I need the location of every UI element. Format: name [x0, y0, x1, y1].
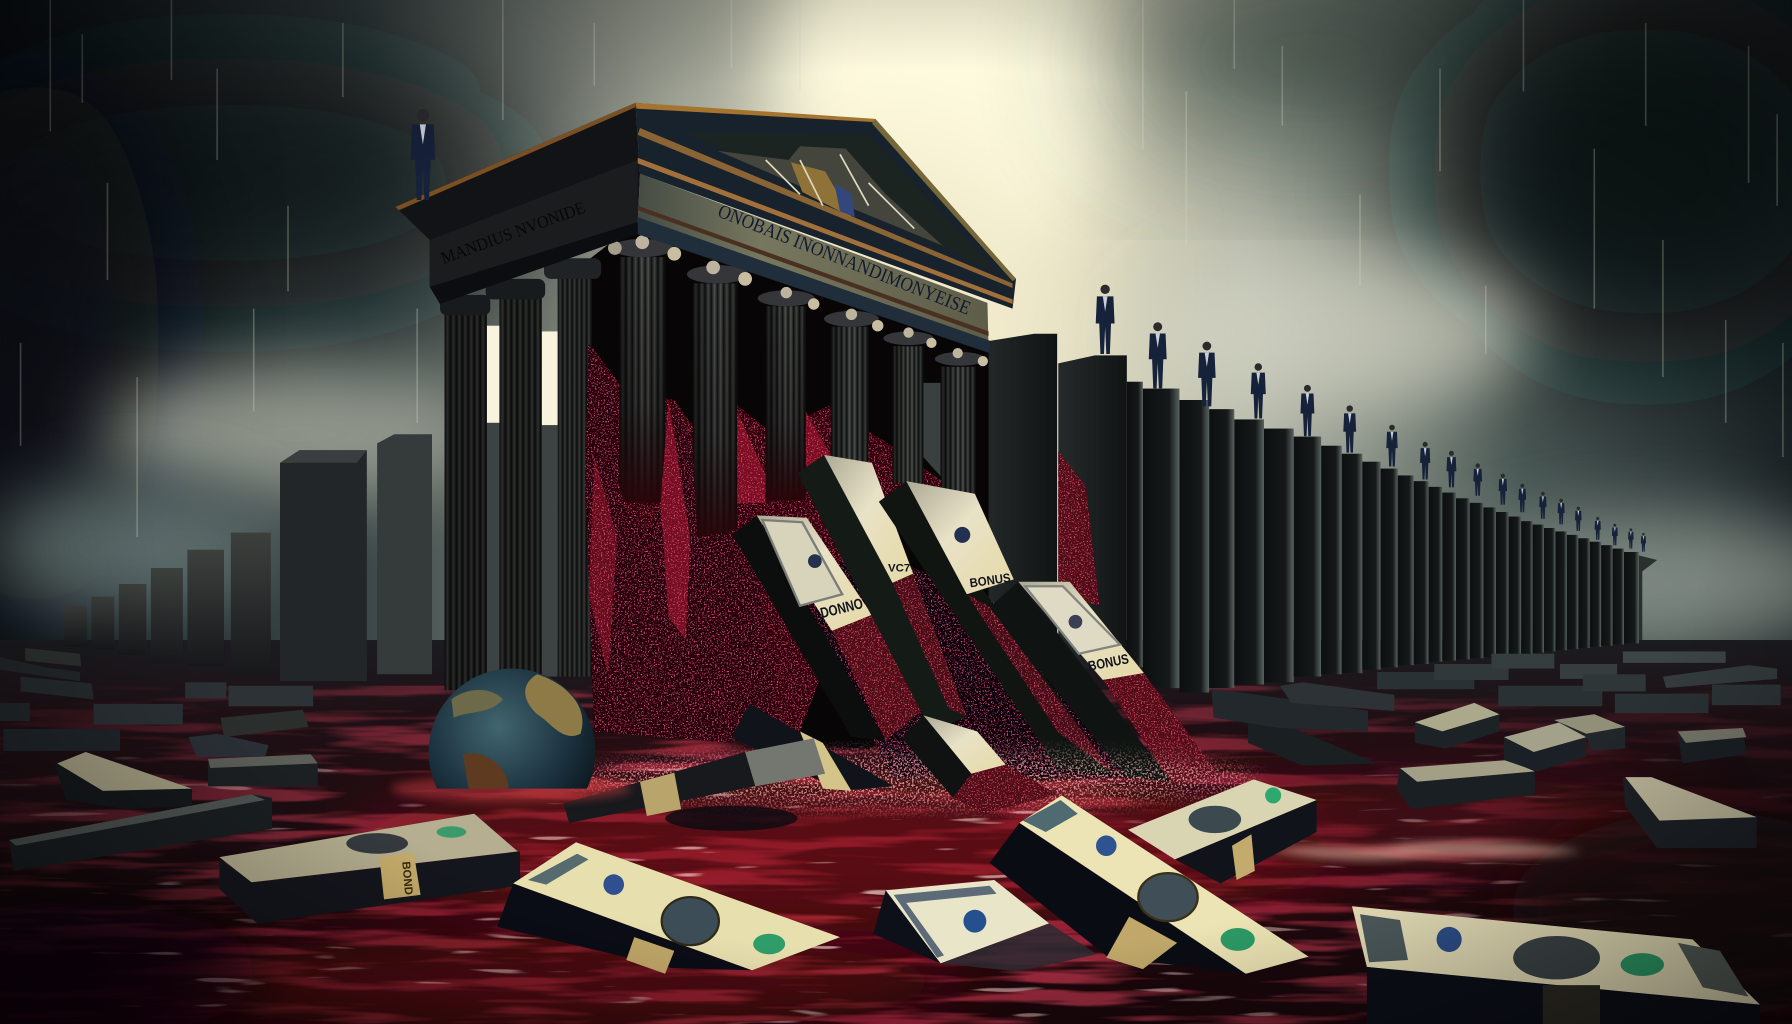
bond stack: third [879, 481, 1114, 775]
money stack: large foreground bill [1352, 906, 1760, 1024]
fallen bond blocks [563, 704, 1057, 831]
bond stack: front right [990, 582, 1221, 782]
figure on temple roof [411, 109, 435, 200]
money stack: lower left [219, 814, 520, 923]
money stack: bill on water [497, 842, 840, 974]
money stack: half-sunken bill [873, 880, 1097, 971]
blood cascade in front of columns [585, 343, 777, 743]
bond stack: left: DONNO [819, 596, 865, 622]
row of standing figures on the wall [1096, 285, 1646, 552]
floating stacks: right side [1211, 651, 1781, 848]
money stack: behind tilted bill [1128, 779, 1317, 883]
money stack: lower left: BOND [399, 861, 414, 895]
bond stack: front right: BONUS [1087, 651, 1130, 674]
flood water [0, 640, 1792, 1024]
far left pillars [64, 434, 432, 681]
sky background [0, 0, 1792, 686]
side roof [395, 103, 640, 287]
floating stacks: left side [0, 648, 318, 871]
temple entablature and pediment [395, 103, 1016, 353]
pediment [635, 103, 1016, 309]
bond stack: third: BONUS [969, 571, 1011, 590]
pediment relief sculpture [718, 146, 943, 246]
temple: bright gaps and dark interior [485, 222, 989, 749]
temple columns [440, 235, 988, 690]
sparkling foam at the base of the stacks [571, 752, 1257, 807]
money stack: large tilted bill [990, 795, 1309, 974]
front entablature face [638, 174, 989, 350]
frieze inscription, side: MANDIUS NVONIDE [438, 198, 588, 268]
blood cascade behind columns [589, 343, 949, 731]
bond stack: second: VC7 [888, 562, 910, 574]
cracked globe [388, 668, 634, 807]
dark mass behind bond stacks [800, 549, 1143, 777]
bond stack: left [733, 515, 921, 741]
right wall of descending slabs [977, 334, 1657, 693]
rain streaks [21, 0, 1783, 537]
frieze inscription, front: ONOBAIS INONNANDIMONYEISE [715, 201, 973, 320]
bond stack: second [798, 455, 967, 731]
